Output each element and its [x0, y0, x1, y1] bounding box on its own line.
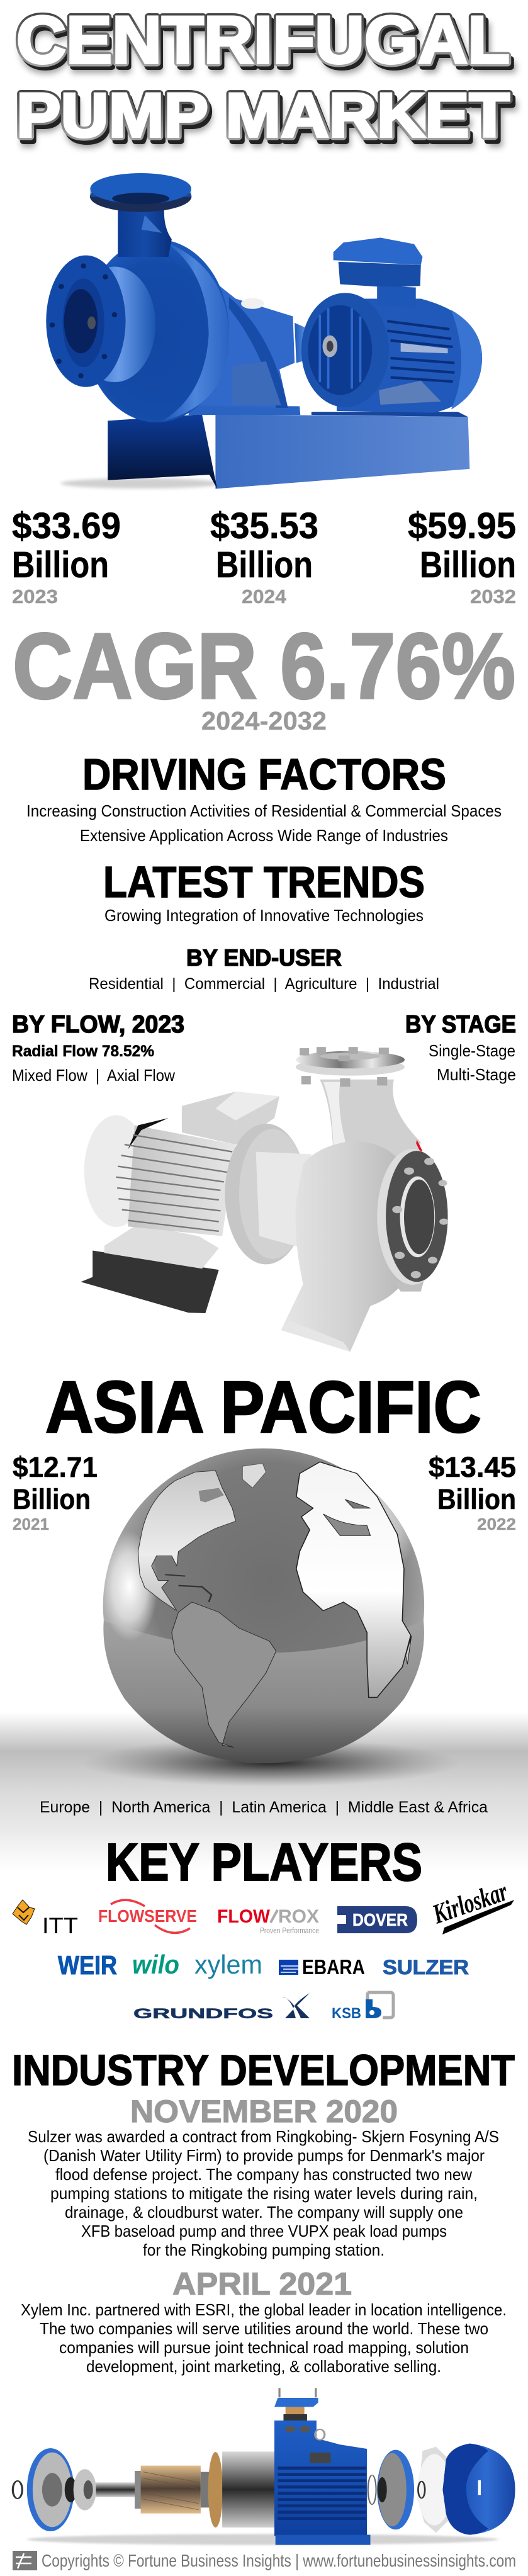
by end-user segment: [89, 945, 439, 993]
illustration: grey pump: [81, 1047, 448, 1352]
latest trends: [103, 857, 425, 925]
logo: Weir: WEIR: [58, 1950, 117, 1980]
logo: Dover: DOVER: [352, 1910, 408, 1929]
logo: Flowrox: Proven Performance: [260, 1926, 319, 1935]
logo: Flowserve: [98, 1900, 197, 1933]
stat: 2024 market value: 2024: [242, 585, 287, 607]
title: CENTRIFUGAL: [19, 6, 513, 81]
illustration: globe: [101, 1449, 424, 1763]
logo: Grundfos: GRUNDFOS: [133, 2006, 273, 2021]
stat: 2024 market value: [210, 506, 318, 607]
stat: 2023 market value: [12, 506, 121, 607]
title: CENTRIFUGAL: [16, 2, 510, 77]
logo: Ebara: [279, 1955, 365, 1979]
by stage segment: [405, 1011, 516, 1084]
stat: 2021 regional value: Billion: [13, 1483, 91, 1515]
development: April 2021: APRIL 2021: [172, 2266, 352, 2302]
logo: Flowserve: FLOWSERVE: [98, 1906, 197, 1926]
development: November 2020: for the Ringkobing pumping station.: [143, 2240, 385, 2259]
logo: Xylem: xylem: [194, 1950, 262, 1979]
by flow segment: Mixed Flow | Axial Flow: [12, 1066, 175, 1085]
logo: Sulzer: SULZER: [383, 1956, 469, 1979]
development: April 2021: development, joint marketing, & collaborative selling.: [86, 2357, 441, 2376]
stat: 2024 market value: $35.53: [210, 506, 318, 546]
title: PUMP MARKET: [19, 84, 513, 154]
logo: Flowrox: ROX: [278, 1906, 319, 1927]
driving factors: Increasing Construction Activities of Residential & Commercial Spaces: [26, 801, 502, 820]
title: CENTRIFUGAL: [19, 10, 516, 86]
development: November 2020: drainage, & cloudburst water. The company will supply one: [65, 2203, 463, 2222]
illustration: exploded motor: [13, 2388, 515, 2545]
stat: 2022 regional value: [429, 1451, 516, 1534]
key players heading: KEY PLAYERS: [106, 1833, 422, 1892]
logo: Dover: [337, 1906, 417, 1933]
CAGR figure: 2024-2032: [201, 706, 327, 735]
development: November 2020: (Danish Water Utility Firm) to provide pumps for Denmark's major: [43, 2146, 485, 2165]
title: PUMP MARKET: [16, 80, 510, 150]
stat: 2022 regional value: 2022: [477, 1515, 516, 1534]
stat: 2032 market value: 2032: [470, 585, 516, 607]
driving factors: [26, 750, 502, 845]
by flow segment: BY FLOW, 2023: [12, 1011, 184, 1038]
by stage segment: Multi-Stage: [437, 1065, 516, 1084]
by stage segment: Single-Stage: [429, 1041, 515, 1060]
by end-user segment: BY END-USER: [186, 945, 342, 971]
stat: 2023 market value: $33.69: [12, 506, 121, 546]
by flow segment: [12, 1011, 184, 1085]
stat: 2021 regional value: 2021: [13, 1515, 49, 1534]
logo: Wilo: wilo: [132, 1950, 179, 1979]
logo: ITT: [13, 1900, 78, 1938]
by flow segment: Radial Flow 78.52%: [12, 1042, 154, 1060]
development: November 2020: XFB baseload pump and three VUPX peak load pumps: [81, 2222, 447, 2240]
title: PUMP MARKET: [19, 89, 516, 159]
stat: 2032 market value: Billion: [420, 545, 516, 585]
stat: 2032 market value: $59.95: [408, 506, 516, 546]
logo: Flowrox: FLOW: [217, 1906, 271, 1927]
by end-user segment: Residential | Commercial | Agriculture | Industrial: [89, 975, 439, 993]
latest trends: Growing Integration of Innovative Technologies: [104, 906, 424, 925]
illustration: blue centrifugal pump: [46, 173, 482, 489]
by stage segment: BY STAGE: [405, 1011, 516, 1038]
logo: Grundfos: [133, 1993, 310, 2021]
other regions: Europe | North America | Latin America | Middle East & Africa: [40, 1799, 488, 1816]
development: November 2020: [28, 2094, 499, 2259]
stat: 2023 market value: 2023: [12, 585, 58, 607]
stat: 2032 market value: [408, 506, 516, 607]
logo: ITT: ITT: [42, 1914, 78, 1938]
development: November 2020: NOVEMBER 2020: [130, 2094, 398, 2129]
stat: 2022 regional value: $13.45: [429, 1451, 516, 1483]
driving factors: Extensive Application Across Wide Range of Industries: [80, 826, 448, 845]
stat: 2022 regional value: Billion: [437, 1483, 516, 1515]
stat: 2024 market value: Billion: [216, 545, 313, 585]
logo: Kirloskar: [429, 1875, 514, 1935]
logo: KSB: KSB: [332, 2005, 361, 2022]
logo: KSB: [332, 1992, 393, 2022]
driving factors: DRIVING FACTORS: [82, 750, 446, 799]
stat: 2021 regional value: $12.71: [13, 1451, 98, 1483]
Asia Pacific heading: ASIA PACIFIC: [45, 1366, 481, 1448]
floor shadow backdrop: [0, 1712, 528, 1870]
title: CENTRIFUGAL: [16, 2, 510, 77]
development: April 2021: The two companies will serve utilities around the world. These two: [40, 2319, 488, 2338]
title: [16, 2, 516, 159]
title: PUMP MARKET: [16, 80, 510, 150]
development: November 2020: Sulzer was awarded a contract from Ringkobing- Skjern Fosyning A/S: [28, 2127, 499, 2146]
stat: 2023 market value: Billion: [12, 545, 109, 585]
development: April 2021: companies will pursue joint technical road mapping, solution: [59, 2338, 469, 2357]
latest trends: LATEST TRENDS: [103, 857, 425, 907]
stat: 2021 regional value: [13, 1451, 98, 1534]
development: November 2020: pumping stations to mitigate the rising water levels during rain,: [50, 2184, 478, 2203]
logo: Ebara: EBARA: [302, 1955, 365, 1979]
development: November 2020: flood defense project. The company has constructed two new: [55, 2165, 472, 2184]
development: April 2021: [21, 2266, 507, 2376]
logo: Flowrox: [217, 1906, 319, 1935]
